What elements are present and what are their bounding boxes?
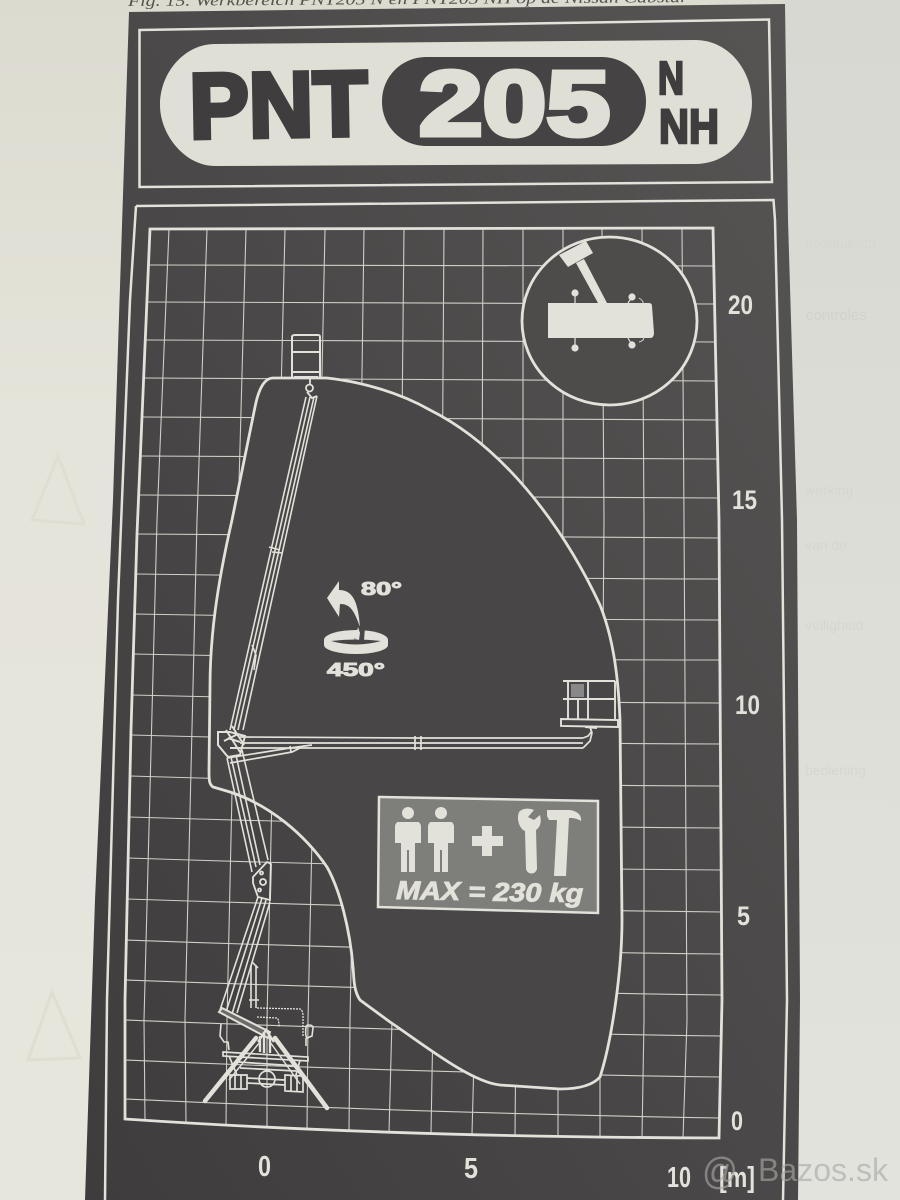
background: book page: van de bbox=[805, 537, 847, 553]
inset: top view circle bbox=[522, 237, 697, 405]
background: book page: veiligheid bbox=[805, 617, 863, 633]
logo pill bbox=[160, 40, 752, 166]
height 15: 15 bbox=[732, 485, 757, 515]
basket top view bbox=[559, 241, 593, 267]
knuckle plate bbox=[253, 862, 271, 900]
load panel bbox=[378, 797, 598, 913]
wrist at boom tip bbox=[306, 379, 317, 398]
unit metres: [m] bbox=[719, 1162, 755, 1194]
truck mirrors bbox=[220, 1024, 313, 1050]
boom top view bbox=[576, 259, 607, 303]
reach axis labels bbox=[258, 1151, 755, 1194]
height 0: 0 bbox=[731, 1106, 743, 1136]
boom cylinder bbox=[227, 745, 312, 763]
background: book page: bediening bbox=[805, 762, 866, 778]
icon: hammer bbox=[547, 810, 581, 876]
dark panel bbox=[85, 4, 800, 1200]
icon: person bbox=[428, 807, 454, 872]
icon: watermark at sign: @ bbox=[702, 1151, 738, 1193]
upper boom bbox=[230, 396, 317, 730]
panel: working range frame bbox=[105, 200, 787, 1200]
lower arm bbox=[227, 750, 268, 872]
base arm bbox=[220, 897, 270, 1014]
horizontal boom bbox=[240, 731, 592, 750]
elbow hinge bbox=[218, 726, 245, 757]
chassis and wheels bbox=[223, 1052, 308, 1092]
truck top view bbox=[548, 303, 654, 338]
label: 80 degrees: 80° bbox=[361, 579, 402, 599]
height 20: 20 bbox=[728, 290, 753, 320]
icon: person bbox=[395, 807, 421, 872]
model variant: NH: NH bbox=[659, 101, 719, 154]
label: max load: MAX = 230 kg bbox=[396, 875, 584, 908]
panel: header bbox=[140, 20, 772, 187]
turret beam bbox=[219, 1008, 270, 1038]
icon: outreach arrow bbox=[327, 581, 360, 627]
model variant: N: N bbox=[658, 52, 684, 104]
background: book page: werking bbox=[804, 482, 853, 498]
turret column bbox=[258, 1030, 274, 1053]
icon: turntable bbox=[324, 626, 388, 654]
label: 450 degrees: 450° bbox=[327, 660, 385, 680]
working envelope bbox=[209, 378, 622, 1089]
watermark bbox=[702, 1151, 889, 1193]
outrigger legs bbox=[205, 1038, 327, 1108]
logo number badge bbox=[382, 53, 646, 155]
lift cylinder bbox=[249, 965, 259, 1008]
reach 10: 10 bbox=[667, 1162, 691, 1194]
watermark text: Bazos.sk bbox=[758, 1152, 889, 1188]
background: book page: controles bbox=[806, 307, 867, 324]
height 10: 10 bbox=[735, 690, 760, 720]
outriggers bbox=[572, 290, 635, 351]
top basket bbox=[292, 335, 320, 377]
logo number badge: 205 bbox=[419, 53, 610, 155]
height 5: 5 bbox=[737, 901, 750, 931]
icon: wrench bbox=[518, 809, 541, 874]
icon: plus bbox=[472, 826, 503, 856]
side basket bbox=[561, 681, 618, 733]
reach 0: 0 bbox=[258, 1151, 271, 1183]
small figure in basket bbox=[571, 684, 584, 697]
height axis labels bbox=[728, 290, 760, 1136]
rotation symbol bbox=[324, 579, 402, 680]
logo text: PNT: PNT bbox=[189, 53, 368, 158]
background: book page: hydraulisch bbox=[805, 235, 876, 251]
chart grid bbox=[125, 228, 722, 1138]
machine drawing: platform lift bbox=[205, 335, 618, 1108]
reach 5: 5 bbox=[464, 1153, 478, 1185]
truck cab outline bbox=[257, 1008, 303, 1037]
